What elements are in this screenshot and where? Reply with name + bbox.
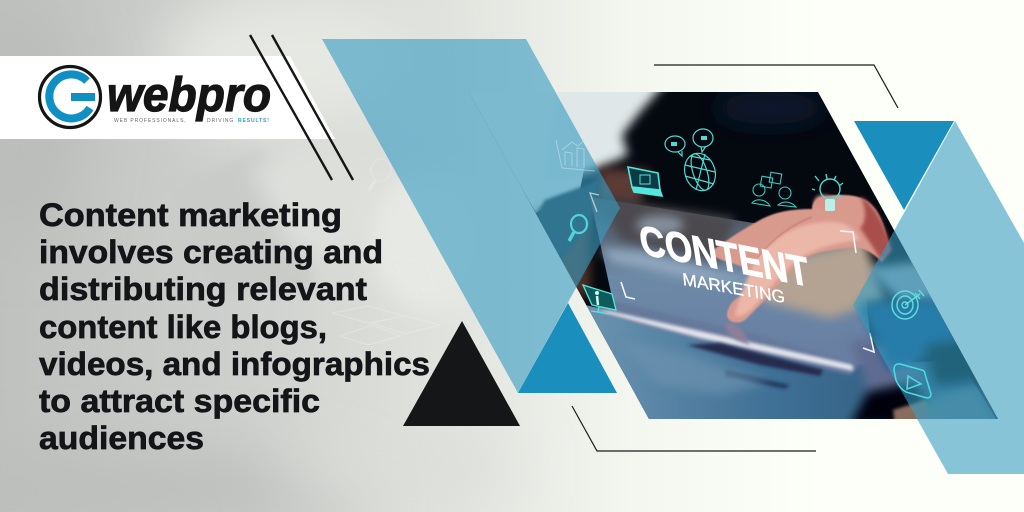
logo tagline: DRIVING <box>207 118 234 124</box>
headline text: involves creating and <box>39 234 383 270</box>
logo band <box>0 56 335 139</box>
icon: magnifier <box>569 215 587 241</box>
photo base <box>460 90 1005 425</box>
logo wordmark: webpro <box>107 69 271 122</box>
icon: presenter monitor <box>583 285 616 314</box>
headline text: videos, and infographics <box>39 346 430 382</box>
headline text: to attract specific <box>39 383 320 419</box>
photo: content marketing laptop <box>460 80 1005 425</box>
logo <box>40 66 271 128</box>
icon: laptop <box>628 167 662 196</box>
logo tagline <box>114 118 270 124</box>
chevron: light blue right <box>853 121 1024 474</box>
triangle: blue upper right <box>854 121 954 210</box>
blurred background highlights <box>465 80 668 300</box>
hand <box>713 195 892 345</box>
headline text: audiences <box>39 420 204 456</box>
translucent screen panel and desk <box>590 197 885 425</box>
holographic frame corners <box>621 231 874 352</box>
logo tagline: WEB PROFESSIONALS, <box>114 118 187 124</box>
laptop and keyboard <box>585 298 1000 425</box>
headline text: distributing relevant <box>39 271 367 307</box>
icon: growth chart <box>556 135 595 171</box>
headline text <box>39 197 430 456</box>
triangle: blue lower <box>518 303 617 393</box>
bottom connector line <box>572 406 816 451</box>
frame corner over chevron <box>590 193 599 212</box>
logo tagline: RESULTS! <box>238 118 270 124</box>
chevron: light blue left <box>322 39 620 393</box>
logo mark <box>40 66 100 128</box>
headline text: Content marketing <box>39 197 342 233</box>
holographic headline: MARKETING <box>682 269 786 307</box>
diagonal line right <box>272 35 353 180</box>
icon: target <box>892 290 924 319</box>
icon: globe with speech bubbles <box>665 129 720 195</box>
holographic headline: CONTENT <box>636 216 812 296</box>
icon: people and documents <box>752 172 796 207</box>
icon: light bulb <box>812 174 843 211</box>
faded icons and keys <box>332 159 440 345</box>
triangle: black <box>403 321 520 426</box>
headline text: content like blogs, <box>39 309 327 345</box>
dark wedge right of panel <box>867 258 933 302</box>
icon: play button <box>894 364 931 398</box>
top right connector line <box>654 65 898 108</box>
diagonal line left <box>250 35 332 180</box>
